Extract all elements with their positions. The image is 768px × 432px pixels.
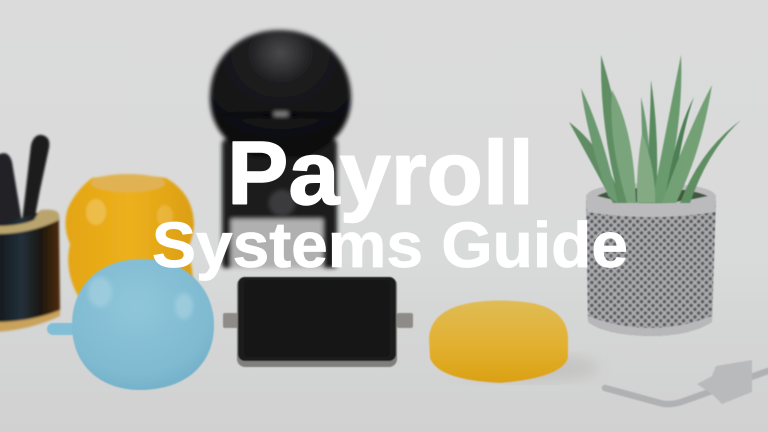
icon: metal hex key with clamp [605, 360, 768, 404]
icon: yellow blob container [65, 174, 194, 296]
title line 1: Payroll [227, 124, 534, 224]
title [152, 124, 628, 281]
icon: black sphere device [210, 30, 351, 268]
plant leaves [569, 55, 741, 203]
icon: pen cup [0, 135, 60, 332]
icon: potted plant [569, 55, 741, 336]
icon: black handheld device [223, 277, 413, 367]
icon: blue round container [47, 259, 214, 390]
title line 2: Systems Guide [152, 209, 628, 281]
metal perforated pot [586, 183, 716, 336]
icon: yellow round puck [429, 300, 600, 383]
